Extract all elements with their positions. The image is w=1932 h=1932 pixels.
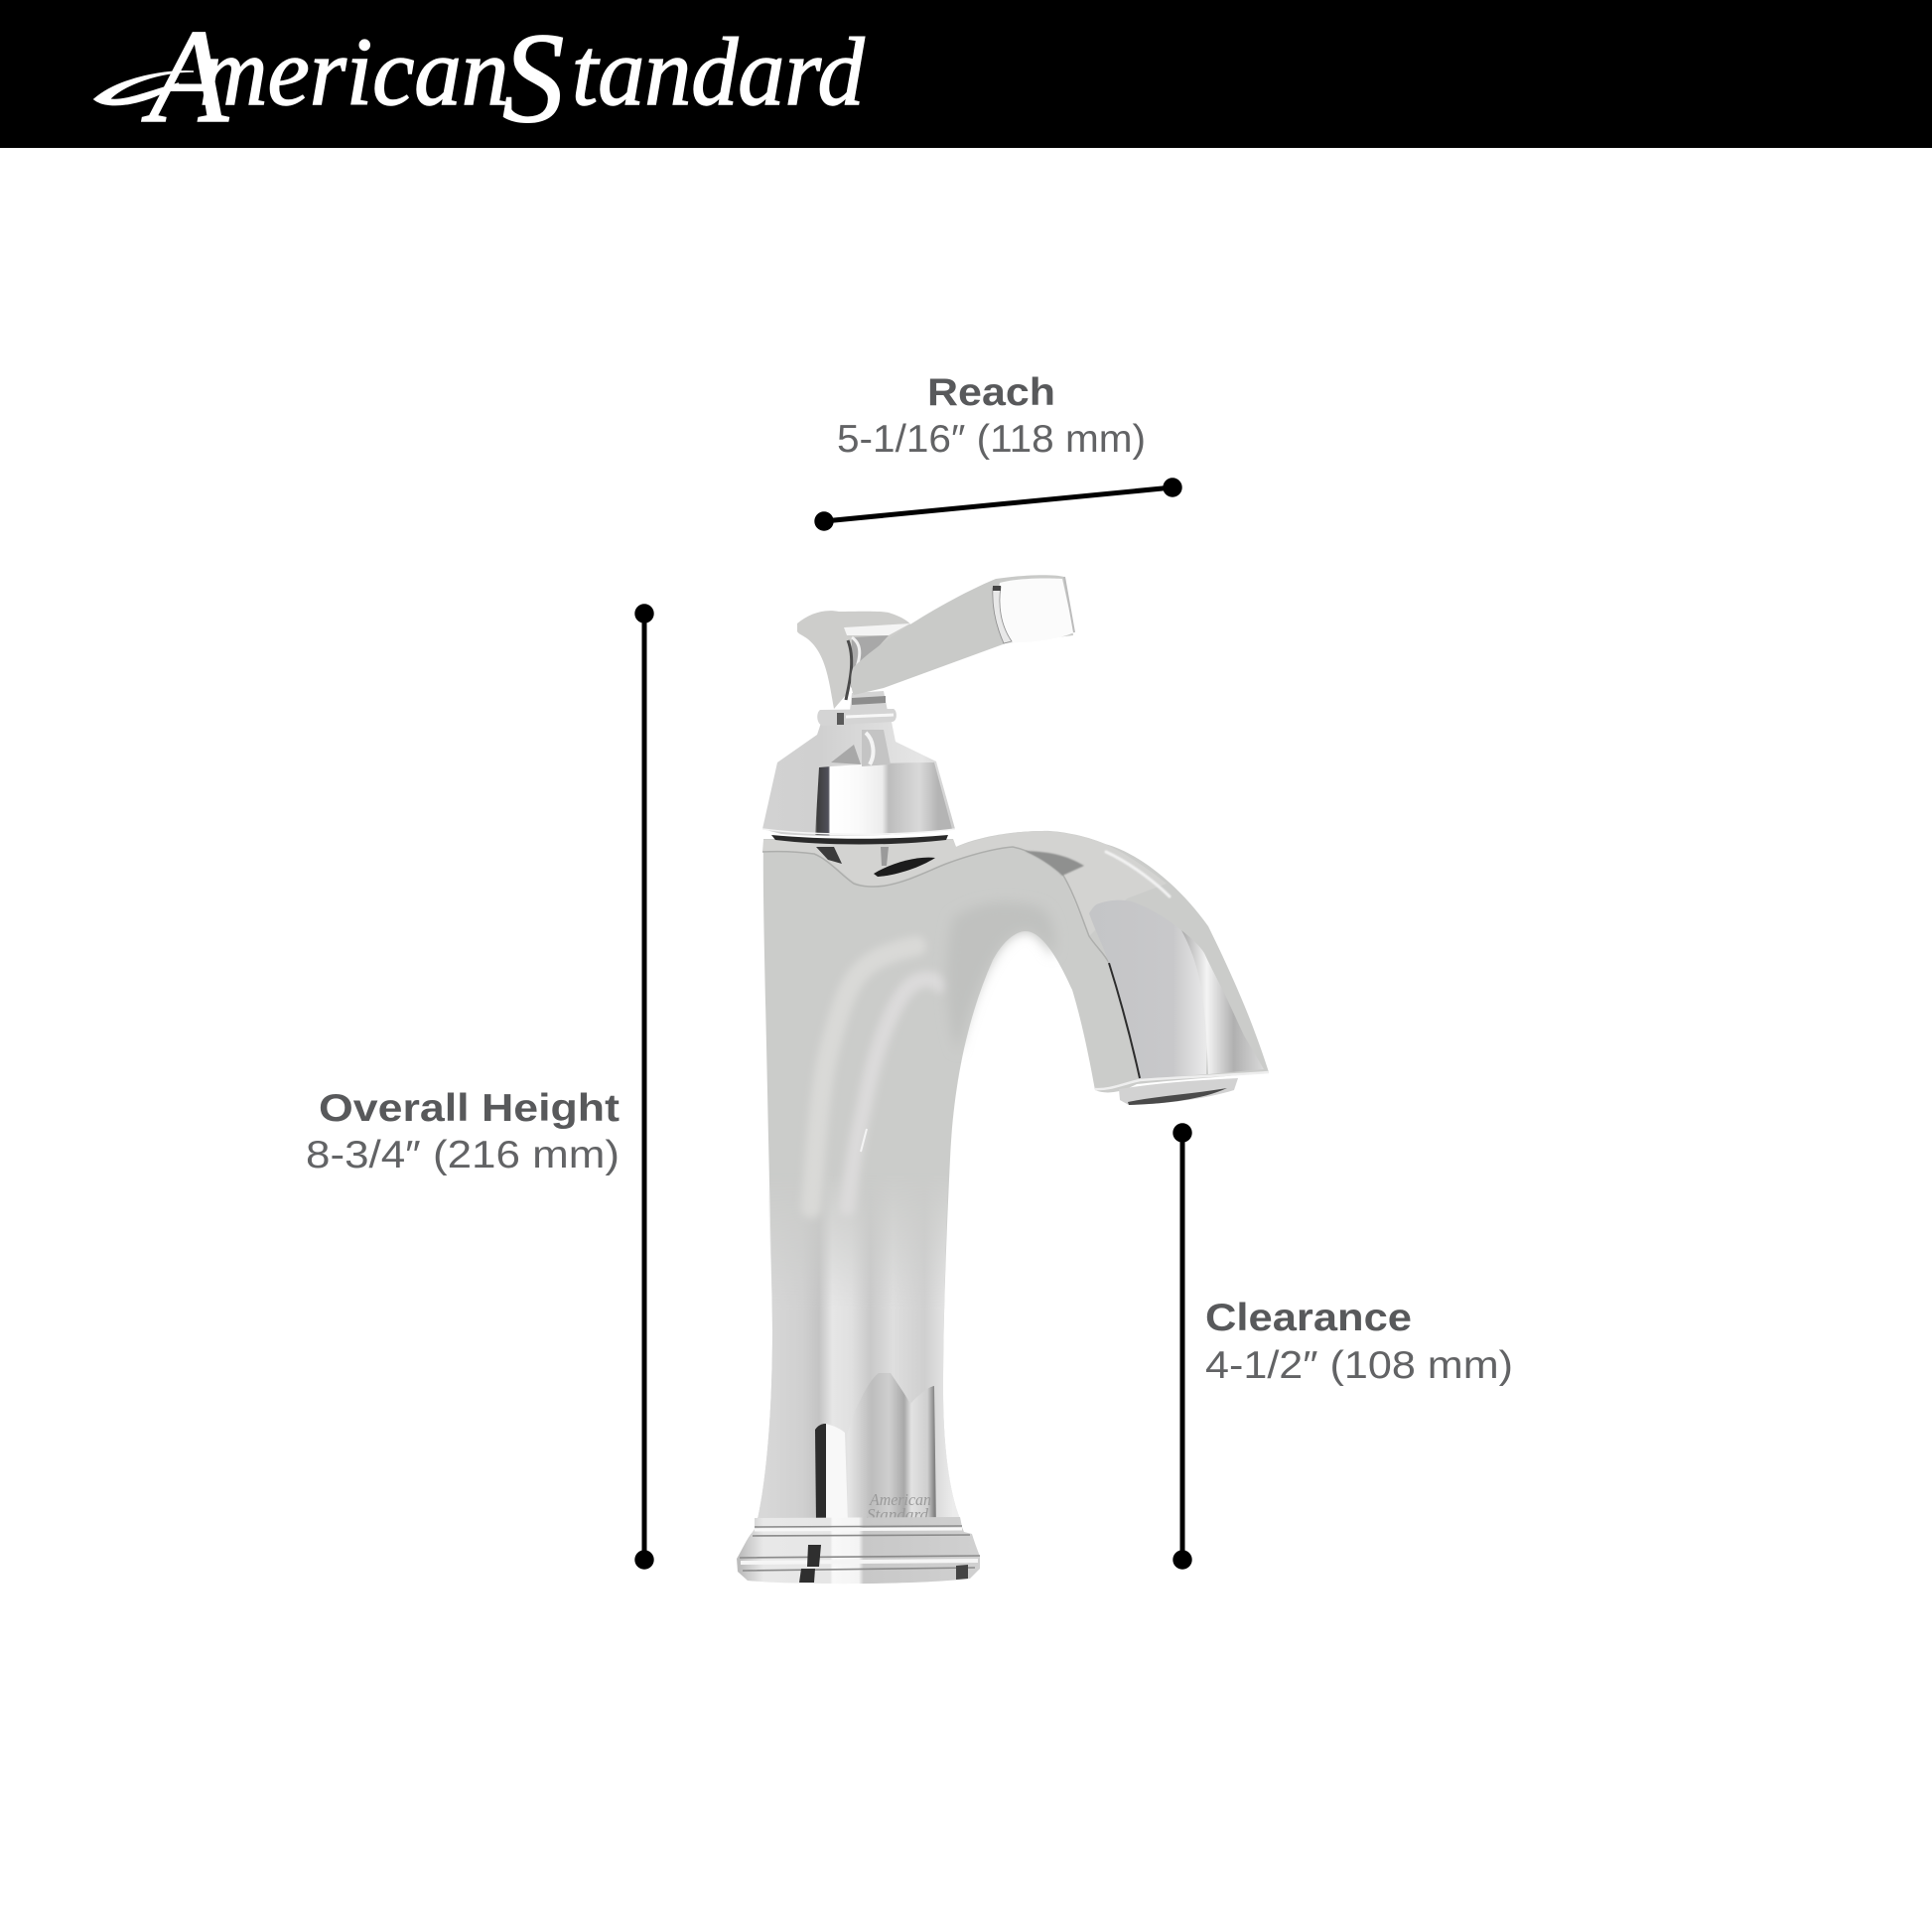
column inner highlight curves [811,946,940,1208]
swoop band along body top [762,831,1167,936]
spout and body [758,831,1269,1519]
reach label: 5-1/16″ (118 mm) [837,418,1146,461]
spout top streak [1106,852,1170,897]
handle fin [797,611,911,709]
spout right reflection [1181,930,1264,1074]
base rings [737,1517,980,1584]
lower column reflections [758,1172,960,1519]
spout top dark patch [1025,851,1084,876]
logo: American Standard: A [141,1,229,150]
glint [861,1129,867,1152]
lever [851,575,1074,695]
spout seam [1109,963,1140,1078]
spout underside shadow [947,901,1055,1052]
reach line [814,478,1182,531]
logo: American Standard: merican [200,18,508,125]
overall height line [634,604,654,1570]
overall height label [306,1087,620,1176]
dimension: reach [814,371,1182,531]
valve cap [762,722,955,836]
dimension: overall height [306,604,654,1570]
small engraved logo [867,1490,931,1524]
header band [0,0,1932,150]
clearance line [1173,1123,1192,1570]
small engraved logo: Standard [867,1505,928,1524]
overall height label: Overall Height [319,1087,620,1130]
faucet illustration [737,575,1269,1584]
black gasket ring [771,835,948,877]
dimension: clearance [1173,1123,1513,1570]
reach label: Reach [927,371,1055,414]
logo: American Standard: tandard [572,17,865,125]
spout face [1089,900,1208,1079]
spout rim [1095,1072,1269,1089]
lower column stripes [815,1373,936,1524]
logo: American Standard: S [502,6,564,150]
clearance label: 4-1/2″ (108 mm) [1205,1344,1513,1387]
overall height label: 8-3/4″ (216 mm) [306,1134,620,1176]
small engraved logo: American [869,1490,931,1509]
clearance label: Clearance [1205,1297,1412,1339]
aerator [1119,1078,1238,1105]
reach label [837,371,1146,461]
collar and neck [817,691,897,726]
clearance label [1205,1297,1513,1387]
logo: American Standard [94,1,865,150]
